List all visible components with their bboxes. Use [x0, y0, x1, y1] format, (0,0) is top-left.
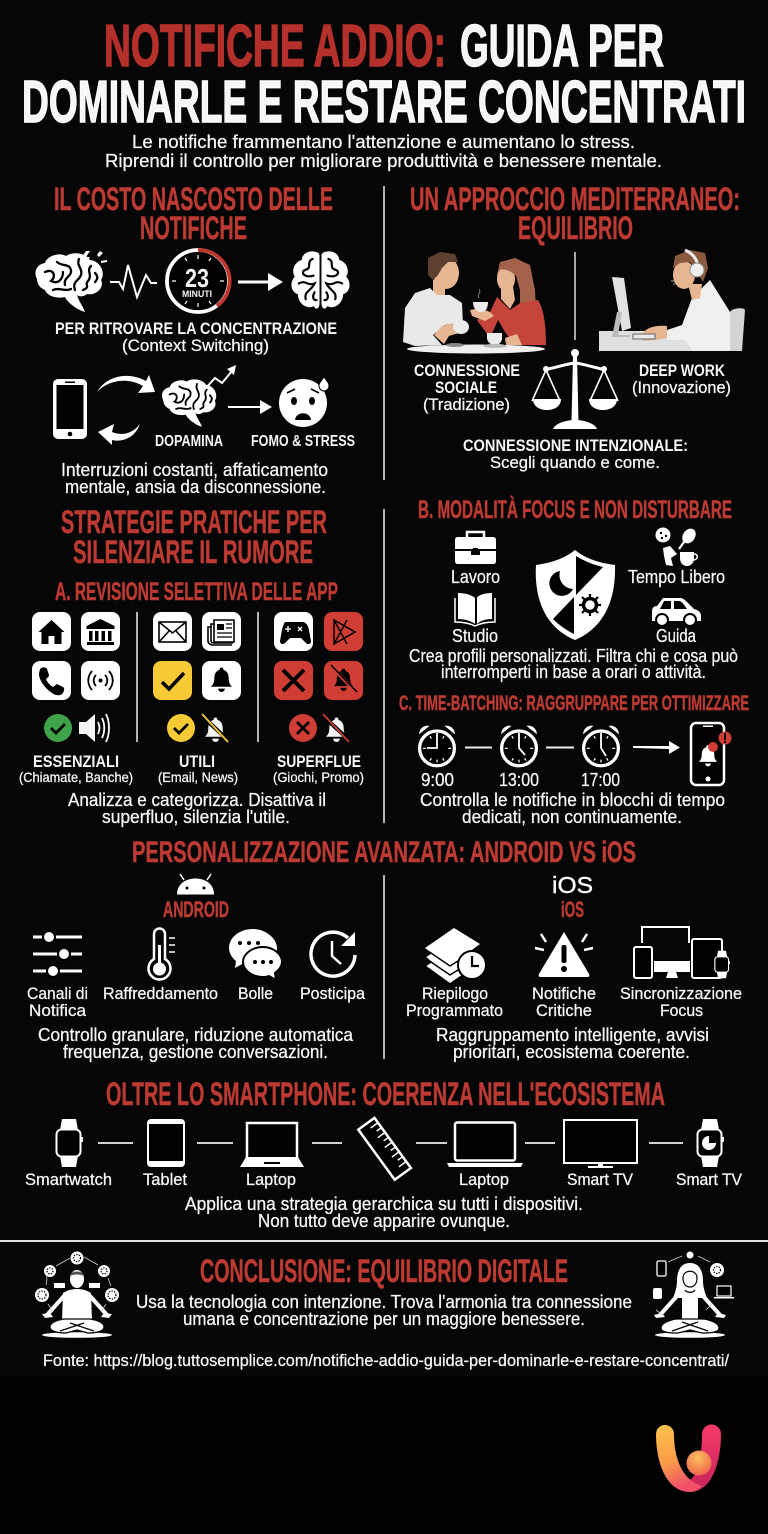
icon: android head [177, 874, 214, 894]
label: driving: Guida [656, 626, 697, 646]
labels: android features: Notifica [29, 1001, 87, 1020]
arrow [228, 400, 272, 414]
label: work: Lavoro [451, 567, 500, 587]
subtitle: Le notifiche frammentano l'attenzione e aumentano lo stress. [132, 131, 635, 152]
text: conclusion [136, 1292, 632, 1329]
icon: smartwatch [56, 1119, 83, 1167]
text: android summary [38, 1025, 354, 1062]
text: analyse: Analizza e categorizza. Disattiva il [68, 790, 326, 810]
labels: android features: Bolle [238, 984, 273, 1003]
heading: hidden cost: IL COSTO NASCOSTO DELLE [54, 181, 333, 217]
device labels: Smartwatch [25, 1170, 112, 1189]
heading: strategies: SILENZIARE IL RUMORE [73, 534, 313, 570]
title: NOTIFICHE ADDIO: [104, 13, 446, 79]
label: deep work: (Innovazione) [632, 378, 731, 397]
icon: alarm clock 17:00 [583, 726, 619, 766]
column dividers [383, 186, 385, 1059]
label: leisure: Tempo Libero [628, 567, 725, 587]
device labels: Smart TV [676, 1170, 743, 1189]
icon: pulse line [110, 265, 157, 297]
text: refocus: PER RITROVARE LA CONCENTRAZIONE [55, 319, 337, 338]
text: ecosystem summary: Non tutto deve apparire ovunque. [258, 1211, 510, 1231]
text: refocus [55, 319, 337, 355]
text: ecosystem summary [185, 1194, 583, 1231]
labels: ios features: Programmato [406, 1001, 503, 1020]
status: essential on [44, 714, 109, 742]
text: interruptions [61, 460, 328, 497]
text: intentional connection: Scegli quando e come. [490, 453, 660, 472]
labels: android features: Canali di [27, 984, 88, 1003]
label: study: Studio [452, 626, 498, 646]
device labels: Smart TV [567, 1170, 634, 1189]
logo [656, 1424, 721, 1492]
tile column dividers [137, 612, 258, 742]
text: analyse [68, 790, 326, 827]
arrow [633, 741, 680, 754]
text: android summary: Controllo granulare, riduzione automatica [38, 1025, 354, 1045]
text: interruptions: mentale, ansia da disconnessione. [65, 477, 326, 497]
heading: strategies: STRATEGIE PRATICHE PER [61, 504, 327, 540]
app tiles: essentials [32, 612, 120, 700]
text: batches: dedicati, non continuamente. [462, 807, 682, 827]
subtitle [105, 131, 662, 171]
source line: Fonte: https://blog.tuttosemplice.com/notifiche-addio-guida-per-dominarle-e-restare-concentrati/ [43, 1351, 729, 1370]
text: intentional connection [463, 436, 688, 472]
icon: phone [53, 379, 87, 439]
app tiles: useful [153, 612, 241, 700]
panel: time batching [399, 692, 749, 827]
text: analyse: superfluo, silenzia l'utile. [102, 807, 290, 827]
connector lines [465, 746, 574, 748]
time labels: 17:00 [581, 770, 620, 790]
icon: stacked layers clock [425, 928, 486, 984]
text: android summary: frequenza, gestione conversazioni. [63, 1042, 328, 1062]
icon: open book [455, 593, 495, 626]
heading: selective review: A. REVISIONE SELETTIVA DELLE APP [55, 578, 338, 606]
device labels: Tablet [143, 1170, 187, 1189]
icon: tablet [148, 1120, 184, 1166]
icon: cycle arrows [97, 375, 155, 445]
panel: ios [406, 872, 742, 1062]
label: social connection [414, 361, 520, 414]
status: useful silenced [167, 714, 228, 742]
text: interruptions: Interruzioni costanti, affaticamento [61, 460, 328, 480]
status: superfluous off [289, 714, 349, 742]
panel: focus modes [409, 495, 738, 682]
icon: thermometer [148, 929, 175, 980]
panel: practical strategies [19, 504, 364, 827]
panel: hidden cost [35, 181, 355, 497]
icon: car [652, 598, 701, 626]
labels: dopamine and fomo [155, 433, 355, 450]
icon: phone with bell [691, 723, 732, 785]
icon: 23 minute timer: 23 [185, 263, 209, 293]
heading: mediterranean approach [410, 181, 740, 246]
label: android: ANDROID [163, 897, 229, 922]
text: profiles [409, 646, 738, 682]
app tiles: superfluous [274, 612, 363, 700]
label: useful: UTILI [179, 752, 215, 771]
panel: conclusion [35, 1252, 734, 1370]
icon: laptop [240, 1123, 304, 1167]
icon: briefcase [455, 532, 496, 564]
device labels: Laptop [246, 1170, 296, 1189]
text: ios summary: prioritari, ecosistema coerente. [453, 1042, 690, 1062]
panel: android [27, 874, 366, 1062]
text: ecosystem summary: Applica una strategia gerarchica su tutti i dispositivi. [185, 1194, 583, 1214]
labels: android features [27, 984, 366, 1020]
illustration: meditating woman [653, 1252, 734, 1338]
text: conclusion: Usa la tecnologia con intenzione. Trova l'armonia tra connessione [136, 1292, 632, 1312]
icon: alarm clock 9:00 [419, 726, 455, 766]
icon: dopamine brain [162, 365, 236, 427]
logo: ios word: iOS [552, 872, 593, 898]
labels: ios features: Critiche [536, 1001, 592, 1020]
icon: 23 minute timer: MINUTI [182, 289, 212, 300]
illustration: meditating man [35, 1252, 119, 1338]
label: superfluous [273, 752, 364, 785]
labels: ios features: Focus [660, 1001, 703, 1020]
icon: shield [536, 550, 615, 640]
label: deep work [632, 361, 731, 397]
labels: dopamine and fomo: FOMO & STRESS [251, 433, 355, 450]
icon: alarm clock 13:00 [501, 726, 537, 766]
labels: ios features [406, 984, 742, 1020]
text: profiles: interromperti in base a orari o attività. [441, 662, 706, 682]
text: ios summary: Raggruppamento intelligente, avvisi [436, 1025, 709, 1045]
icon: ruler [358, 1118, 411, 1180]
text: batches [420, 790, 725, 827]
label: useful [158, 752, 238, 785]
heading: mediterranean approach: EQUILIBRIO [518, 210, 633, 246]
illustration: couple with coffee [403, 252, 546, 354]
icon: 23 minute timer [167, 250, 230, 312]
icon: calm brain [291, 251, 350, 309]
heading: strategies [61, 504, 327, 570]
heading: hidden cost: NOTIFICHE [140, 210, 247, 246]
icon: smart tv [564, 1120, 637, 1168]
text: intentional connection: CONNESSIONE INTENZIONALE: [463, 436, 688, 455]
heading: hidden cost [54, 181, 333, 246]
connector lines [98, 1142, 683, 1144]
label: superfluous: (Giochi, Promo) [273, 769, 364, 785]
label: superfluous: SUPERFLUE [277, 752, 361, 771]
labels: ios features: Sincronizzazione [620, 984, 742, 1003]
label: essentials [19, 752, 133, 785]
label: social connection: (Tradizione) [423, 395, 510, 414]
icon: leisure items [656, 526, 699, 566]
time labels: 9:00 [421, 770, 454, 790]
panel: ecosystem [25, 1076, 743, 1231]
labels: ios features: Notifiche [532, 984, 596, 1003]
icon: laptop large [447, 1122, 523, 1167]
section rule [0, 1240, 768, 1242]
icon: snooze clock [311, 932, 355, 976]
icon: worried face [279, 377, 329, 427]
label: social connection: SOCIALE [435, 378, 497, 397]
text: batches: Controlla le notifiche in blocchi di tempo [420, 790, 725, 810]
panel: mediterranean approach [403, 181, 745, 472]
text: conclusion: umana e concentrazione per un maggiore benessere. [183, 1309, 585, 1329]
subtitle: Riprendi il controllo per migliorare produttività e benessere mentale. [105, 150, 662, 171]
title [22, 13, 746, 135]
time labels: 13:00 [499, 770, 539, 790]
text: ios summary [436, 1025, 709, 1062]
device labels: Laptop [459, 1170, 509, 1189]
icon: zapped brain [35, 251, 107, 312]
label: useful: (Email, News) [158, 769, 238, 785]
divider between illustrations [574, 252, 576, 340]
label: ios: iOS [561, 897, 584, 922]
time labels [421, 770, 620, 790]
text: refocus: (Context Switching) [122, 336, 269, 355]
icon: critical alert [535, 932, 593, 977]
labels: ios features: Riepilogo [422, 984, 488, 1003]
icon: sliders [33, 931, 82, 977]
icon: balance scale [532, 349, 618, 429]
label: essentials: ESSENZIALI [33, 752, 119, 771]
labels: android features: Posticipa [300, 984, 366, 1003]
icon: synced devices [634, 927, 730, 978]
arrow [238, 273, 283, 291]
icon: chat bubbles [229, 929, 282, 980]
icon: smartwatch with chart [698, 1119, 724, 1167]
device labels [25, 1170, 743, 1189]
labels: dopamine and fomo: DOPAMINA [155, 433, 223, 450]
label: social connection: CONNESSIONE [414, 361, 520, 380]
label: deep work: DEEP WORK [639, 361, 726, 380]
label: essentials: (Chiamate, Banche) [19, 769, 133, 785]
illustration: deep work at computer [599, 250, 745, 351]
labels: android features: Raffreddamento [103, 984, 218, 1003]
